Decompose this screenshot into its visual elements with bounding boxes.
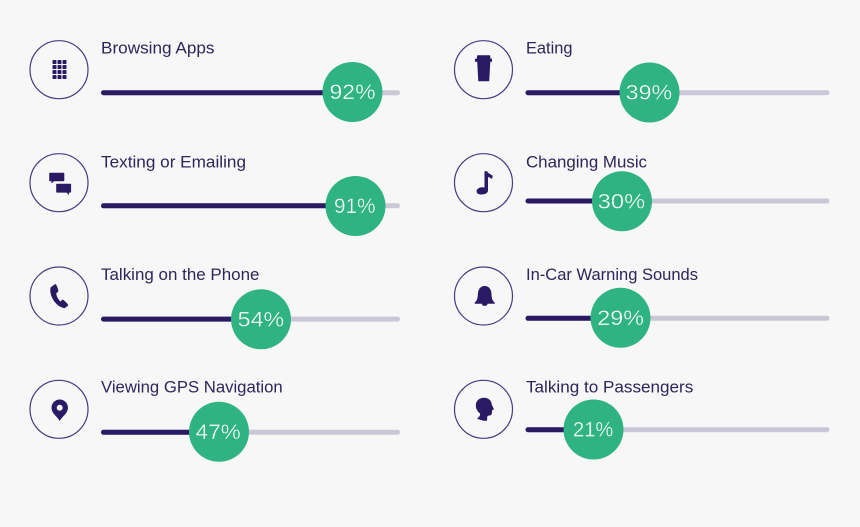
bar: 39% — [526, 90, 830, 95]
panel: Talking to Passengers — [454, 379, 830, 460]
value badge: 47%: 47% — [196, 421, 241, 444]
panel: Talking on the Phone — [30, 266, 400, 349]
icon: head silhouette — [454, 380, 512, 438]
icon: map pin — [30, 380, 88, 438]
icon: bell — [454, 267, 512, 325]
value badge: 29%: 29% — [597, 307, 644, 330]
label: Talking on the Phone: Talking on the Phone — [101, 266, 260, 284]
panel: In-Car Warning Sounds — [454, 266, 830, 348]
panel: Changing Music — [454, 153, 830, 231]
icon: music note — [454, 154, 512, 212]
label: Eating: Eating — [526, 39, 572, 57]
value badge: 39%: 39% — [626, 82, 672, 104]
label: In-Car Warning Sounds: In-Car Warning Sounds — [526, 266, 698, 284]
bar: 92% — [101, 90, 400, 95]
value badge: 91%: 91% — [334, 195, 376, 218]
value badge: 91% — [326, 176, 386, 236]
value badge: 30% — [592, 171, 652, 231]
bar: 91% — [101, 203, 400, 208]
icon: app grid — [30, 41, 88, 99]
value badge: 21% — [564, 400, 624, 460]
value badge: 92%: 92% — [330, 81, 376, 104]
value badge: 21%: 21% — [573, 418, 613, 442]
bar: 21% — [526, 427, 830, 432]
value badge: 29% — [590, 288, 650, 348]
value badge: 54% — [231, 289, 291, 349]
value badge: 39% — [620, 62, 680, 122]
icon: chat bubbles — [30, 154, 88, 212]
label: Browsing Apps: Browsing Apps — [101, 39, 214, 57]
icon: takeaway cup — [454, 41, 512, 99]
bar: 54% — [101, 317, 400, 322]
label: Changing Music: Changing Music — [526, 153, 647, 171]
label: Texting or Emailing: Texting or Emailing — [101, 153, 246, 171]
panel: Viewing GPS Navigation — [30, 379, 400, 462]
panel: Texting or Emailing — [30, 153, 400, 236]
label: Talking to Passengers: Talking to Passengers — [526, 379, 693, 397]
value badge: 47% — [189, 402, 249, 462]
panel: Browsing Apps — [30, 39, 400, 122]
value badge: 54%: 54% — [238, 308, 284, 331]
bar: 47% — [101, 430, 400, 435]
label: Viewing GPS Navigation: Viewing GPS Navigation — [101, 379, 283, 397]
bar: 30% — [526, 198, 830, 204]
icon: phone — [30, 267, 88, 325]
panel: Eating — [454, 39, 830, 122]
bar: 29% — [526, 316, 830, 321]
value badge: 92% — [322, 62, 382, 122]
value badge: 30%: 30% — [598, 190, 645, 213]
